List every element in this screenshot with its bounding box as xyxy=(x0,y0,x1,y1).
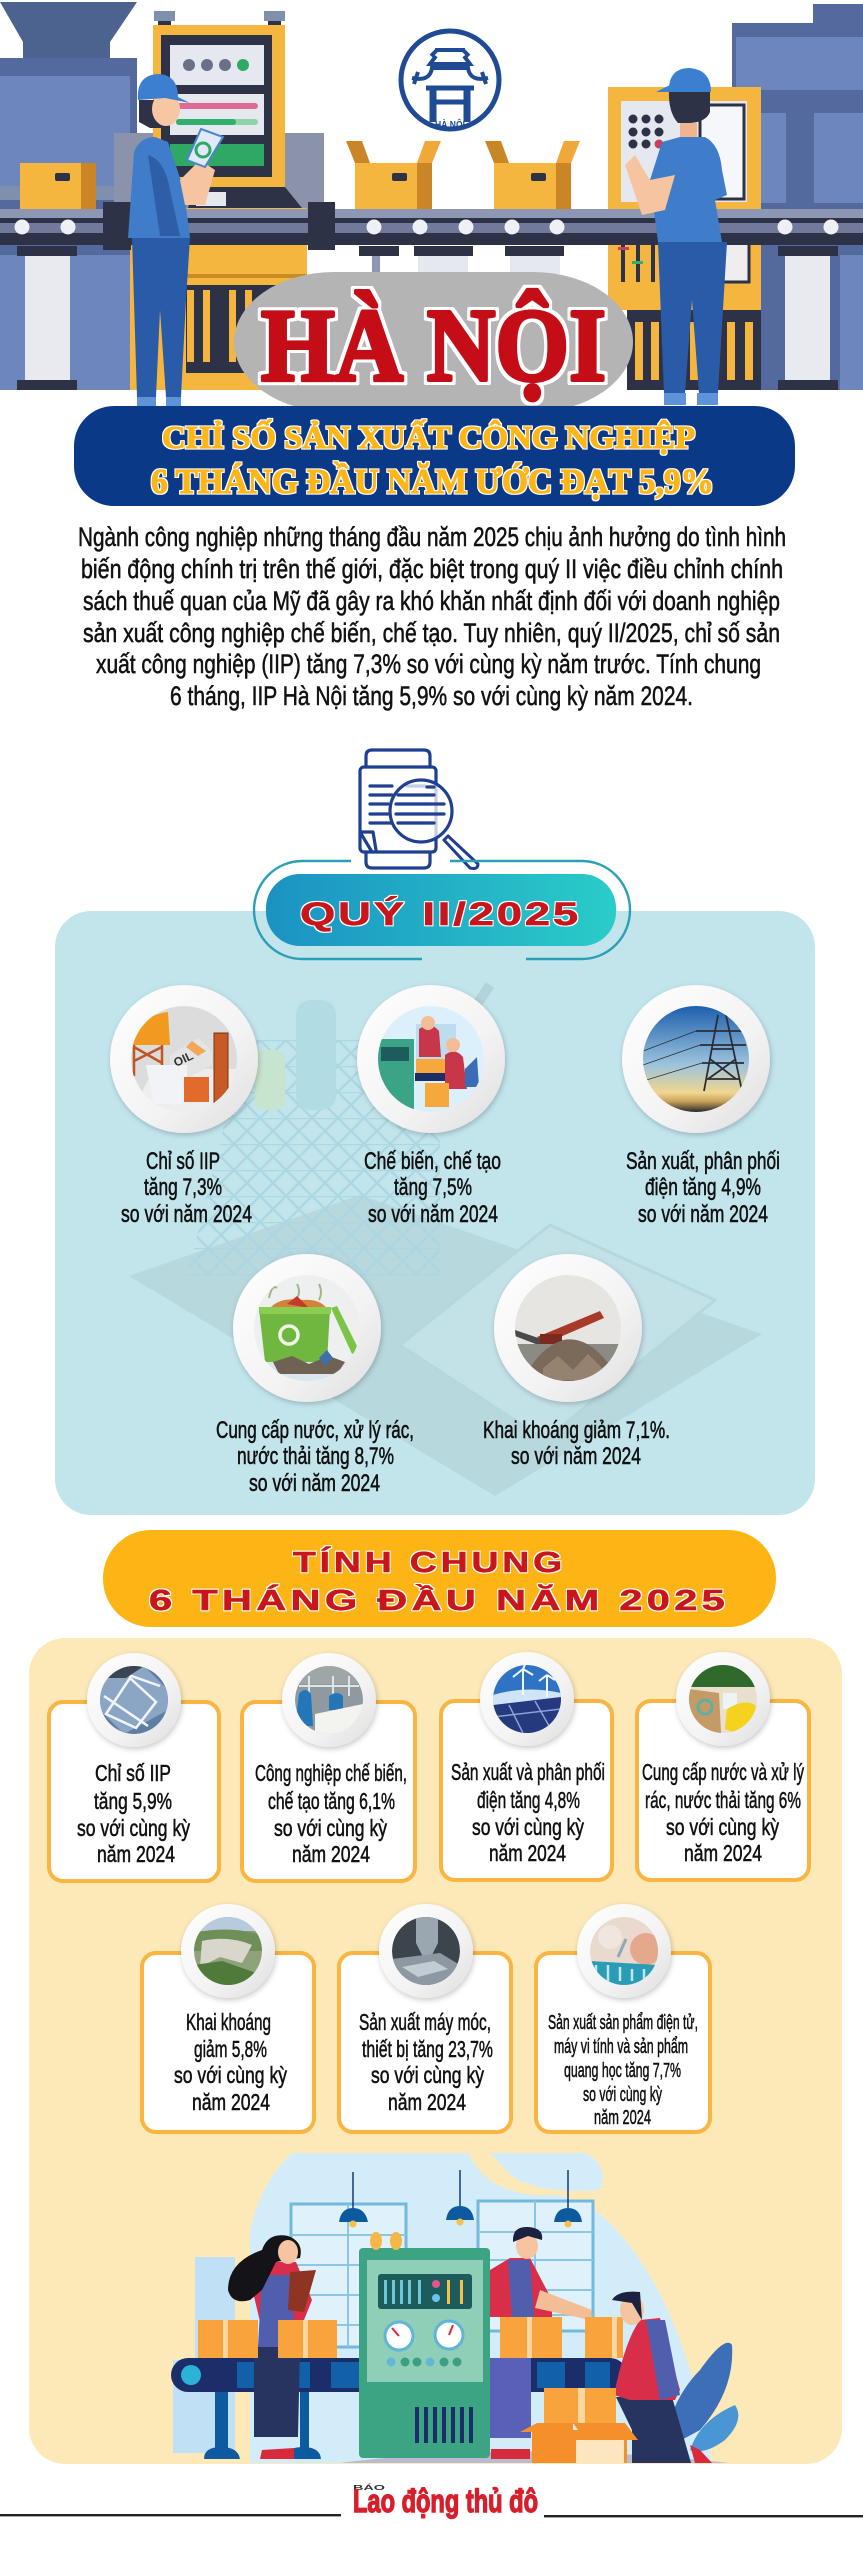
caption: Cung cấp nước, xử lý rác, xyxy=(216,1417,414,1444)
card: Cung cấp nước và xử lý rác: năm 2024 xyxy=(684,1840,762,1866)
footer divider right xyxy=(544,2515,863,2517)
card: Chỉ số IIP xyxy=(49,1653,219,1881)
card: Sản xuất sản phẩm điện tử: Sản xuất sản phẩm điện tử, xyxy=(548,2011,698,2034)
item: Sản xuất, phân phối điện xyxy=(622,985,780,1228)
caption: so với năm 2024 xyxy=(121,1201,252,1228)
intro paragraph xyxy=(78,522,786,711)
image: recycling bin xyxy=(233,1254,381,1402)
card: Sản xuất máy móc xyxy=(339,1904,511,2132)
intro paragraph: 6 tháng, IIP Hà Nội tăng 5,9% so với cùng kỳ năm 2024. xyxy=(170,681,693,711)
heading: Quý II/2025 xyxy=(254,861,630,959)
caption: điện tăng 4,9% xyxy=(645,1174,761,1201)
card: Sản xuất máy móc: Sản xuất máy móc, xyxy=(359,2009,491,2035)
card: Sản xuất và phân phối điện: năm 2024 xyxy=(489,1840,566,1866)
heading: Tính chung 6 tháng: 6 THÁNG ĐẦU NĂM 2025 xyxy=(149,1583,729,1617)
logo Hà Nội: HÀ NỘI xyxy=(435,118,465,131)
heading: Tính chung 6 tháng: TÍNH CHUNG xyxy=(293,1545,566,1579)
illustration: factory workers xyxy=(171,2153,738,2463)
caption: so với năm 2024 xyxy=(638,1201,768,1228)
caption: Sản xuất, phân phối xyxy=(626,1148,780,1175)
card: Sản xuất máy móc: so với cùng kỳ xyxy=(371,2062,484,2088)
caption: so với năm 2024 xyxy=(511,1443,641,1470)
logo Hà Nội xyxy=(401,31,499,131)
card: Khai khoáng xyxy=(142,1904,314,2132)
card: Sản xuất sản phẩm điện tử xyxy=(536,1904,710,2132)
caption: Chỉ số IIP xyxy=(146,1148,220,1175)
worker right xyxy=(625,68,727,405)
subtitle banner: 6 THÁNG ĐẦU NĂM ƯỚC ĐẠT 5,9% xyxy=(151,461,714,501)
footer logo: BÁO xyxy=(353,2483,386,2492)
card: Sản xuất sản phẩm điện tử: so với cùng kỳ xyxy=(583,2083,662,2106)
item: Chỉ số IIP xyxy=(110,985,258,1228)
subtitle banner: CHỈ SỐ SẢN XUẤT CÔNG NGHIỆP xyxy=(162,419,695,455)
icon: phone with magnifier xyxy=(360,750,478,868)
caption xyxy=(216,1417,414,1497)
footer divider left xyxy=(0,2514,341,2516)
heading: Tính chung 6 tháng xyxy=(103,1530,776,1627)
machine xyxy=(359,2248,490,2458)
worker man standing xyxy=(490,2358,531,2438)
panel: 6 tháng xyxy=(29,1638,842,2464)
image: mining machine xyxy=(494,1254,642,1402)
title pill: HÀ NỘI: HÀ NỘI xyxy=(261,288,606,403)
card: Sản xuất và phân phối điện: điện tăng 4,8% xyxy=(477,1787,580,1813)
caption xyxy=(483,1417,670,1470)
image: oil refinery xyxy=(110,985,258,1133)
caption xyxy=(626,1148,780,1228)
caption: Chế biến, chế tạo xyxy=(364,1148,501,1175)
caption: nước thải tăng 8,7% xyxy=(237,1443,394,1470)
card: Sản xuất và phân phối điện xyxy=(441,1652,612,1880)
open box xyxy=(544,2388,616,2424)
leaf xyxy=(663,2343,732,2450)
item: Chế biến, chế tạo xyxy=(357,985,505,1228)
card: Sản xuất sản phẩm điện tử: quang học tăng 7,7% xyxy=(564,2059,681,2082)
caption: tăng 7,3% xyxy=(144,1174,222,1201)
caption: so với năm 2024 xyxy=(249,1470,380,1497)
card: Công nghiệp chế biến: so với cùng kỳ xyxy=(274,1815,387,1841)
worker kneeling xyxy=(616,2397,691,2463)
card: Chỉ số IIP: Chỉ số IIP xyxy=(95,1760,171,1786)
image: workers and boxes xyxy=(357,985,505,1133)
caption: tăng 7,5% xyxy=(394,1174,472,1201)
caption xyxy=(364,1148,501,1228)
card: Sản xuất máy móc: thiết bị tăng 23,7% xyxy=(362,2036,493,2062)
card: Sản xuất máy móc: năm 2024 xyxy=(388,2089,466,2115)
caption xyxy=(121,1148,252,1228)
card: Công nghiệp chế biến: chế tạo tăng 6,1% xyxy=(268,1788,395,1814)
image: power pylon xyxy=(622,985,770,1133)
caption: so với năm 2024 xyxy=(368,1201,498,1228)
card: Chỉ số IIP: năm 2024 xyxy=(97,1841,175,1867)
watermark factory xyxy=(129,985,762,1496)
card: Cung cấp nước và xử lý rác: so với cùng kỳ xyxy=(666,1814,779,1840)
worker woman xyxy=(254,2347,300,2437)
card: Sản xuất sản phẩm điện tử: máy vi tính và sản phẩm xyxy=(554,2035,688,2058)
card: Chỉ số IIP: so với cùng kỳ xyxy=(77,1815,190,1841)
header factory illustration xyxy=(0,2,863,390)
card: Công nghiệp chế biến: năm 2024 xyxy=(292,1841,370,1867)
subtitle banner xyxy=(74,406,795,506)
panel: Quý II/2025 background xyxy=(55,911,815,1515)
card: Sản xuất sản phẩm điện tử: năm 2024 xyxy=(594,2106,651,2129)
item: Khai khoáng xyxy=(483,1254,670,1470)
card: Khai khoáng: Khai khoáng xyxy=(186,2009,271,2035)
card: Sản xuất và phân phối điện: Sản xuất và phân phối xyxy=(451,1759,605,1785)
card: Công nghiệp chế biến xyxy=(242,1653,415,1881)
conveyor xyxy=(171,2358,627,2392)
card: Khai khoáng: năm 2024 xyxy=(192,2089,270,2115)
footer logo: Lao động thủ đô xyxy=(353,2483,538,2519)
card: Sản xuất và phân phối điện: so với cùng kỳ xyxy=(472,1814,584,1840)
card: Chỉ số IIP: tăng 5,9% xyxy=(94,1788,172,1814)
heading: Quý II/2025: QUÝ II/2025 xyxy=(300,896,581,932)
card: Cung cấp nước và xử lý rác xyxy=(637,1652,809,1880)
card: Công nghiệp chế biến: Công nghiệp chế biến, xyxy=(255,1760,407,1786)
image: oil refinery: OIL xyxy=(171,1049,195,1070)
item: Cung cấp nước, xử lý rác xyxy=(216,1254,414,1497)
card: Khai khoáng: so với cùng kỳ xyxy=(174,2062,287,2088)
caption: Khai khoáng giảm 7,1%. xyxy=(483,1417,670,1444)
boxes xyxy=(198,2317,623,2358)
worker left xyxy=(128,74,223,406)
card: Khai khoáng: giảm 5,8% xyxy=(194,2036,267,2062)
